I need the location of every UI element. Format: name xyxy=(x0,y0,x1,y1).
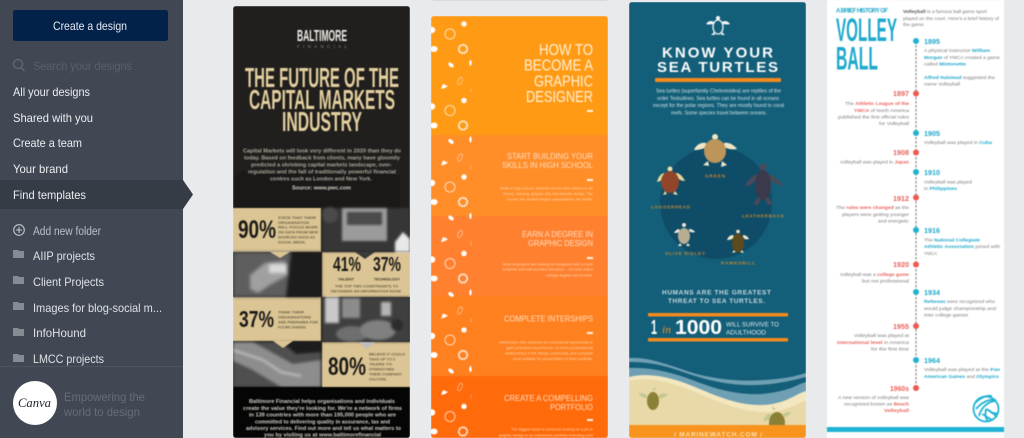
timeline years xyxy=(924,37,941,365)
pointers xyxy=(270,252,290,258)
timeline entries left: A new version of volleyball was xyxy=(838,395,910,401)
step: create a portfolio: graphic design is an impressive portfolio including print xyxy=(499,434,593,438)
step: complete internships: relationships in the design community, and complete xyxy=(505,352,593,356)
heading xyxy=(836,8,897,76)
panel: capital markets infographic xyxy=(233,6,410,438)
step: earn a degree: GRAPHIC DESIGN xyxy=(528,239,593,248)
heading xyxy=(656,46,778,73)
navigation menu: All your designs xyxy=(13,85,90,99)
heading: SEA TURTLES xyxy=(657,59,778,76)
stat: 41 and 37 percent: TECHNOLOGY xyxy=(374,276,400,282)
heading: CAPITAL MARKETS xyxy=(249,84,395,115)
stat: 80 percent xyxy=(328,352,405,382)
threat statement: THREAT TO SEA TURTLES. xyxy=(668,298,765,305)
timeline entries right: in Philippines xyxy=(924,186,957,192)
navigation menu: Find templates xyxy=(13,188,86,202)
footer text block: committed to delivering quality in assurance, tax and xyxy=(255,419,390,425)
timeline dots xyxy=(913,38,919,363)
label: loggerhead: LOGGERHEAD xyxy=(651,204,691,210)
navigation menu: Create a team xyxy=(13,136,82,150)
waves and beach xyxy=(629,358,806,438)
step: earn a degree xyxy=(502,230,593,278)
timeline entries right: Referees were recognized who xyxy=(924,299,995,305)
threat statement: HUMANS ARE THE GREATEST xyxy=(662,290,771,296)
step: start building xyxy=(500,152,593,202)
stat grid xyxy=(233,207,410,387)
timeline entries left: YMCA of North America xyxy=(854,108,909,114)
intro text xyxy=(243,148,402,192)
statistic: 1 in 1000 xyxy=(648,313,788,342)
stat: 90 percent: STATE THAT THEIR xyxy=(278,215,316,220)
step: earn a degree: EARN A DEGREE IN xyxy=(522,230,593,239)
timeline entries right: Morgan of YMCA created a game xyxy=(924,55,1000,61)
stat: 80 percent: STRENGTHEN xyxy=(369,366,394,372)
timeline years: 1916 xyxy=(924,226,940,235)
footer text block: advisory services. Find out more and tell us what matters to xyxy=(246,426,402,432)
timeline entries left: Volleyball was a college game xyxy=(840,272,909,278)
timeline entries right: inter college games xyxy=(924,312,969,318)
timeline entries left: recognized known as Beach xyxy=(844,402,909,408)
panel: sea turtles infographic xyxy=(629,2,806,438)
heading xyxy=(244,67,400,132)
intro text: Sea turtles (superfamily Chelonioidea) are reptiles of the xyxy=(656,88,781,94)
stat: 80 percent: 80% xyxy=(328,353,366,381)
sidebar footer: Canva xyxy=(18,395,51,410)
panel: volleyball history infographic: 1897 xyxy=(893,89,909,98)
timeline entries left: players were getting younger xyxy=(842,212,909,218)
timeline entries right: The National Collegiate xyxy=(924,238,980,244)
timeline entries left: Volleyball was played at xyxy=(854,333,910,339)
add new folder: Add new folder xyxy=(33,226,101,238)
stat: 37 percent: THINK THEIR xyxy=(278,310,304,314)
photo: meeting xyxy=(322,297,410,342)
panel: volleyball history infographic: 1908 xyxy=(893,148,909,157)
footer text block: Baltimore Financial helps organisations and individuals xyxy=(249,399,395,405)
button: create a design xyxy=(13,10,168,41)
panel: volleyball history infographic xyxy=(827,0,1004,438)
statistic: 1 in 1000: ADULTHOOD xyxy=(726,330,766,336)
intro text: centres such as London and New York. xyxy=(270,176,373,182)
intro text xyxy=(653,88,784,116)
panel: graphic designer infographic xyxy=(429,16,608,438)
timeline entries right: would judge championship and xyxy=(924,306,996,312)
folder list: LMCC projects xyxy=(33,352,104,366)
timeline entries right: called Mintonette xyxy=(924,62,966,68)
label: hawksbill: HAWKSBILL xyxy=(721,260,755,266)
timeline entries right xyxy=(924,48,1000,380)
stat: 37 percent: FUTURE CHANGES xyxy=(278,324,306,330)
timeline entries left: but not professional xyxy=(862,278,909,284)
timeline entries left: for the first time xyxy=(871,346,909,352)
step: start building: sooner the student begins preparations, the better. xyxy=(507,198,593,202)
stat: 37 percent xyxy=(238,310,318,329)
step: start building: While in high school, students should take classes in art xyxy=(500,186,593,190)
timeline entries right: name Volleyball xyxy=(924,82,960,88)
icon: turtle logo xyxy=(706,16,730,35)
turtle: green xyxy=(694,134,737,167)
sidebar footer: world to design xyxy=(63,405,140,419)
navigation menu xyxy=(13,85,93,202)
heading: GRAPHIC xyxy=(534,74,593,90)
folder list xyxy=(13,249,162,366)
step: complete internships: Internships offer students an exceptional opportunity to xyxy=(499,340,593,344)
logo: baltimore financial: FINANCIAL xyxy=(297,44,347,49)
footer text block xyxy=(233,387,410,438)
turtle: loggerhead xyxy=(657,166,685,195)
step: complete internships: work suitable for presentation in their portfolio. xyxy=(513,357,593,361)
stat: 41 and 37 percent: DETAINING AN INFORMATION EDGE xyxy=(331,288,401,294)
footer band xyxy=(629,425,806,438)
heading: BECOME A xyxy=(524,58,593,74)
timeline entries right: Alfred Halstead suggested the xyxy=(924,75,995,81)
timeline entries left: The Athletic League of the xyxy=(845,101,909,107)
step: create a portfolio: PORTFOLIO xyxy=(550,403,593,412)
statistic: 1 in 1000: WILL SURVIVE TO xyxy=(726,322,779,328)
step: create a portfolio: The biggest asset to someone looking for a job in xyxy=(511,428,593,432)
step: earn a degree: complete and well-rounded education -- the kind only a xyxy=(502,268,593,272)
timeline years: 1934 xyxy=(924,288,941,297)
navigation menu: Your brand xyxy=(13,162,68,176)
intro text: reefs. Some species travel between oceans. xyxy=(671,110,767,116)
step: complete internships: gain practical experience, to form professional xyxy=(506,346,593,350)
timeline entries right: American Games and Olympics xyxy=(924,374,999,380)
icon: volleyball xyxy=(974,396,998,422)
statistic: 1 in 1000: 1 xyxy=(651,317,657,339)
turtle: hawksbill xyxy=(727,230,749,253)
heading: HOW TO xyxy=(539,42,593,59)
panel: sidebar xyxy=(0,0,193,438)
turtle: beach left xyxy=(638,387,668,410)
intro text: regulation and the fall of traditionally powerful financial xyxy=(248,170,397,176)
folder list: AIIP projects xyxy=(33,249,95,263)
label: green: GREEN xyxy=(705,174,725,178)
footer bar xyxy=(827,427,1004,432)
timeline entries left: published the first official rules xyxy=(838,114,910,120)
stat: 90 percent: ORGANISATION xyxy=(278,220,309,225)
stat: 90 percent: ON DATA FROM NEW xyxy=(278,230,318,234)
navigation menu: Shared with you xyxy=(13,111,93,125)
timeline entries left: and energetic xyxy=(878,218,910,224)
stat: 37 percent: ORGANISATIONS xyxy=(278,314,311,320)
turtle: leatherback xyxy=(745,164,783,205)
stat: 90 percent: WILL FOCUS MORE xyxy=(278,224,318,230)
statistic: 1 in 1000: 1000 xyxy=(675,317,722,339)
top of previous card xyxy=(433,0,607,1)
intro text: except for the polar regions. They are mostly found in coral xyxy=(653,103,784,109)
timeline years: 1905 xyxy=(924,129,940,138)
decorative doodles xyxy=(429,21,472,438)
timeline entries right: Volleyball was played xyxy=(924,180,972,186)
timeline years: 1895 xyxy=(924,37,940,46)
intro text: order Testudines. Sea turtles can be found in all oceans xyxy=(657,96,779,102)
step: earn a degree: college degree can provide. xyxy=(546,274,593,278)
timeline entries left: Volleyball was played in Japan xyxy=(840,160,909,166)
stat: 41 and 37 percent: TALENT xyxy=(338,276,355,282)
timeline entries right: Volleyball was played at the Pan xyxy=(924,367,1000,373)
sidebar footer: Empowering the xyxy=(64,390,145,404)
logo: baltimore financial: BALTIMORE xyxy=(297,28,347,45)
folder list: InfoHound xyxy=(33,326,86,340)
intro text: the game. xyxy=(903,22,925,28)
photo: person reclining xyxy=(233,342,321,387)
step: start building: history, drawing, graphic arts and website design. The xyxy=(503,192,593,196)
heading: KNOW YOUR xyxy=(662,44,773,62)
intro text: Source: www.pwc.com xyxy=(292,186,351,192)
step: complete internships xyxy=(499,314,593,361)
step: complete internships: COMPLETE INTERSHIPS xyxy=(504,314,593,324)
step: create a portfolio: CREATE A COMPELLING xyxy=(504,394,593,403)
stat: 90 percent: SOCIAL MEDIA. xyxy=(278,240,306,244)
photo: laptop xyxy=(322,207,410,252)
footer text block: in 139 countries with more than 195,000 people who are xyxy=(249,413,396,419)
footer text block: create the value they're looking for. We're a network of firms xyxy=(243,406,402,412)
timeline entries left: Volleyball xyxy=(884,408,909,414)
turtle habitat circle xyxy=(660,147,772,259)
timeline entries left: international level in America xyxy=(837,340,909,346)
stat: 80 percent: BELIEVE IT COULD xyxy=(369,352,405,356)
step: start building: START BUILDING YOUR xyxy=(507,152,593,161)
add new folder xyxy=(14,225,101,238)
stat: 90 percent: 90% xyxy=(238,216,276,244)
timeline entries right: Athletic Association joined with xyxy=(924,244,1000,250)
intro text: predicted a shrinking capital markets landscape, over- xyxy=(251,162,392,168)
timeline entries right: Volleyball was played in Cuba xyxy=(924,140,992,146)
threat statement xyxy=(662,290,771,305)
panel: volleyball history infographic: 1912 xyxy=(893,194,909,203)
heading xyxy=(524,42,593,112)
step: start building: SKILLS IN HIGH SCHOOL xyxy=(502,161,593,170)
timeline entries right: A physical instructor William xyxy=(924,48,990,54)
sidebar footer xyxy=(0,366,183,425)
stat: 41 and 37 percent: THE TOP TWO CONSTRAINTS TO xyxy=(335,284,398,288)
folder list: Client Projects xyxy=(33,275,104,289)
timeline axis xyxy=(915,41,917,390)
stat: 80 percent: CULTURE. xyxy=(369,376,387,382)
statistic: 1 in 1000: in xyxy=(662,324,672,336)
intro text xyxy=(903,9,1000,28)
timeline years: 1964 xyxy=(924,356,941,365)
heading: DESIGNER xyxy=(526,89,593,106)
timeline years: 1910 xyxy=(924,168,940,177)
heading: THE FUTURE OF THE xyxy=(245,62,399,93)
panel: volleyball history infographic: 1955 xyxy=(893,322,909,331)
stat: 37 percent: ARE PREPARED FOR xyxy=(278,320,318,324)
stat: 80 percent: YEARS TO xyxy=(369,362,392,366)
turtle: beach right xyxy=(763,406,791,434)
intro text: Volleyball is a famous ball game sport xyxy=(903,9,988,15)
search field: Search your designs xyxy=(33,59,132,73)
stat: 90 percent xyxy=(238,215,318,244)
logo: baltimore financial xyxy=(297,28,347,49)
heading: BALL xyxy=(836,40,878,76)
stat: 41 and 37 percent: 41% xyxy=(333,254,361,276)
stat: 80 percent: TAKE UP TO 3 xyxy=(369,356,396,362)
step: earn a degree: Most employers are looking for designers with a more xyxy=(503,262,593,266)
heading: A BRIEF HISTORY OF xyxy=(836,8,888,14)
stat: 37 percent: 37% xyxy=(239,306,274,332)
intro text: today. Based on feedback from clients, many have gloomily xyxy=(244,156,400,162)
step: create a portfolio xyxy=(499,394,593,438)
timeline entries left: The rules were changed as the xyxy=(836,205,909,211)
stat: 41 and 37 percent xyxy=(331,254,401,294)
active row highlight xyxy=(0,180,193,209)
intro text: Capital Markets will look very different in 2020 than they do xyxy=(243,148,402,154)
heading: INDUSTRY xyxy=(282,106,362,137)
timeline entries left xyxy=(836,101,910,414)
stat: 80 percent: THEIR COMPANY xyxy=(369,372,402,376)
label: leatherback: LEATHERBACK xyxy=(742,214,785,218)
timeline entries left: for Volleyball xyxy=(879,121,909,127)
stat: 41 and 37 percent: 37% xyxy=(373,254,401,276)
panel: volleyball history infographic: 1960s xyxy=(890,384,909,393)
panel: volleyball history infographic: 1920 xyxy=(893,260,909,269)
label: olive ridley: OLIVE RIDLEY xyxy=(665,251,705,256)
stat: 90 percent: SOURCES SUCH AS xyxy=(278,234,315,240)
panel: volleyball history infographic: VOLLEY xyxy=(836,12,897,48)
photo: phone in hand xyxy=(233,252,321,297)
button: create a design: Create a design xyxy=(53,19,127,33)
folder list: Images for blog-social m... xyxy=(33,301,162,315)
timeline entries right: YMCA xyxy=(924,251,938,257)
intro text: played on the court. Here's a brief history of xyxy=(903,16,1000,22)
turtle: olive ridley xyxy=(674,223,695,246)
